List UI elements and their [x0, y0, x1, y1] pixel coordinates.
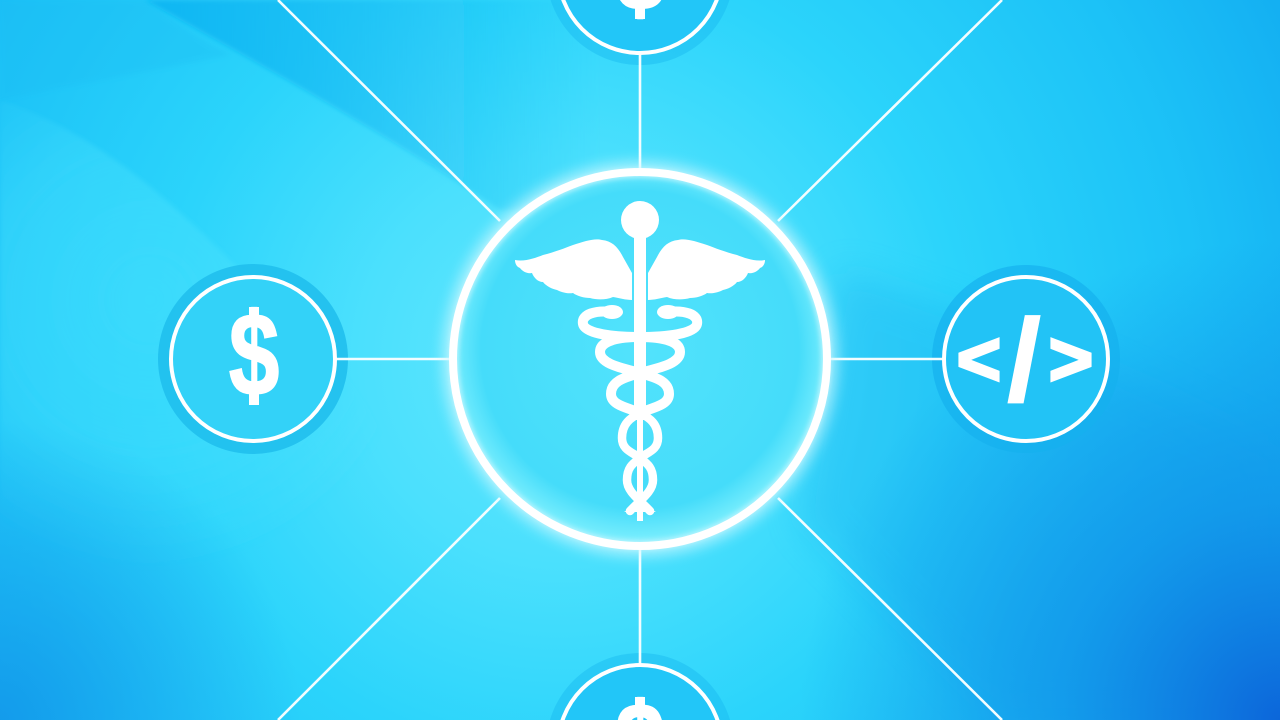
node: right code: >	[1049, 317, 1093, 402]
central medical circle	[450, 169, 830, 549]
node: right code: /	[1007, 296, 1041, 426]
node: left dollar: $	[229, 290, 279, 421]
halos behind outer nodes	[158, 0, 1120, 720]
node: right code	[944, 277, 1108, 441]
node: top dollar	[558, 0, 722, 53]
node: right code: <	[957, 317, 1001, 402]
icon: caduceus	[515, 201, 765, 521]
node: bottom dollar	[558, 665, 722, 720]
connector lines	[278, 0, 1002, 720]
node: left dollar	[171, 277, 335, 441]
icon: caduceus serpents	[583, 312, 697, 511]
